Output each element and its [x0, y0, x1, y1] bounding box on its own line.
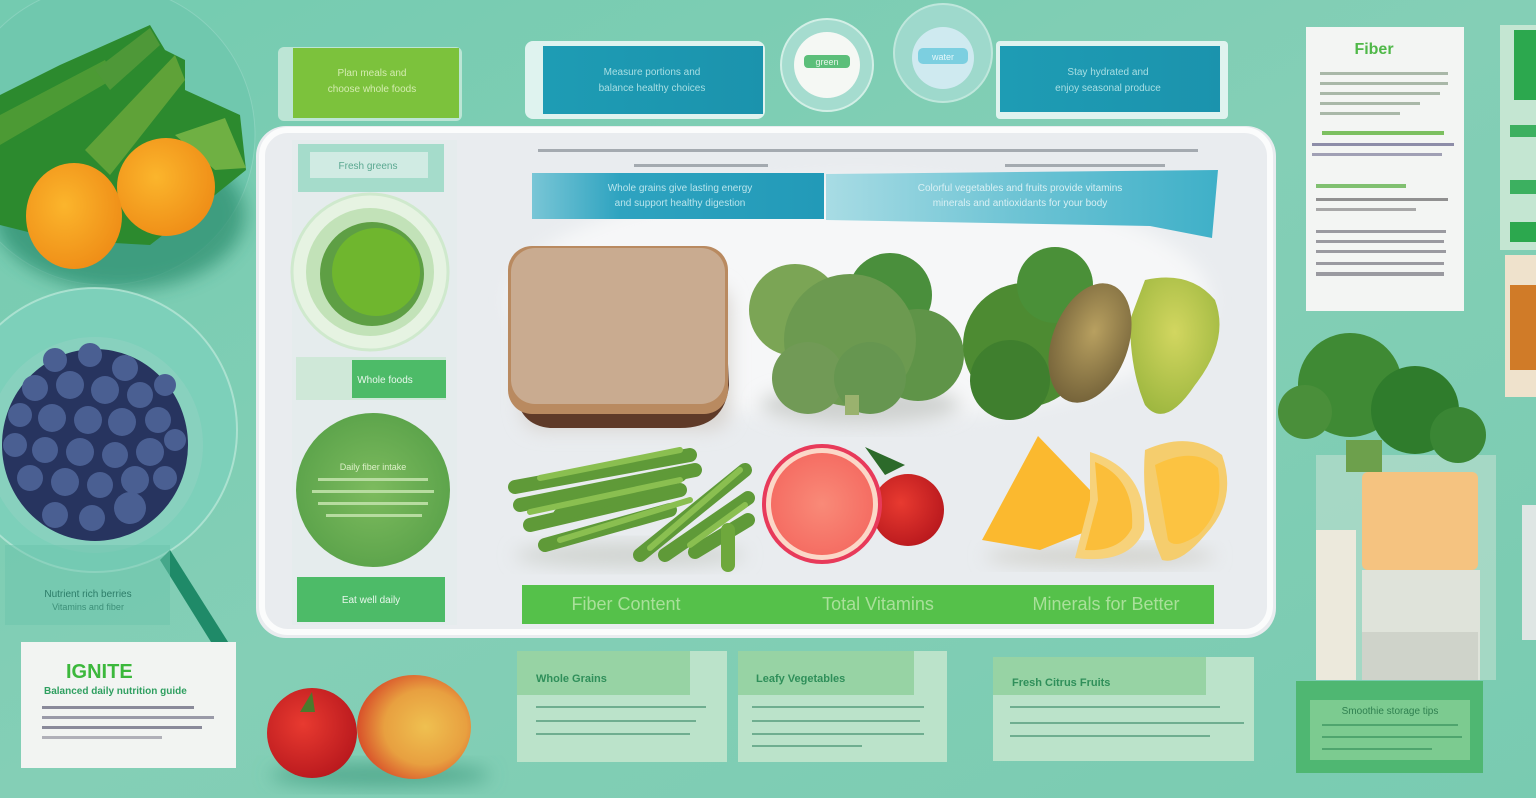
bottom green banner: Minerals for Better	[1032, 594, 1180, 614]
panel: right article: Fiber	[1354, 41, 1394, 58]
panel: top-left greens and oranges	[0, 0, 255, 290]
callout: teal top one	[525, 41, 765, 119]
callout: green top: choose whole foods	[328, 84, 416, 95]
banner: right: Colorful vegetables and fruits provide vitamins	[918, 183, 1122, 194]
food: broccoli	[749, 253, 964, 425]
banner: left	[532, 173, 824, 219]
callout: green top: Plan meals and	[338, 68, 406, 79]
icon: apple and tomato	[267, 675, 490, 787]
label under magnifier	[5, 545, 170, 625]
panel: far right strip	[1500, 25, 1536, 640]
banner: left: and support healthy digestion	[615, 198, 745, 209]
icon: top circle two: water	[931, 52, 954, 62]
note: bottom three: Fresh Citrus Fruits	[1012, 677, 1110, 689]
bottom green banner	[522, 585, 1214, 624]
sidebar bottom tag: Eat well daily	[342, 595, 400, 606]
food: grapefruit and tomato	[762, 444, 944, 564]
header rules	[538, 149, 1198, 167]
callout: teal top two: enjoy seasonal produce	[1055, 83, 1161, 94]
sidebar middle tag	[296, 357, 446, 400]
sidebar middle tag: Whole foods	[357, 375, 413, 386]
green info circle	[296, 413, 450, 567]
banner: left: Whole grains give lasting energy	[608, 183, 752, 194]
callout: teal top one: balance healthy choices	[599, 83, 705, 94]
sidebar header tag	[298, 144, 444, 192]
banner: right	[826, 170, 1218, 238]
main tray	[256, 126, 1276, 638]
icon: top circle two	[894, 4, 992, 102]
panel: blueberry magnifier	[0, 288, 237, 650]
callout: teal top two: Stay hydrated and	[1067, 67, 1149, 78]
bottom green banner: Fiber Content	[571, 594, 681, 614]
icon: top circle one: green	[815, 57, 839, 67]
note: bottom three	[993, 657, 1254, 761]
bottom green banner: Total Vitamins	[822, 594, 934, 614]
food: greens with potato and pear	[963, 247, 1220, 420]
icon: green bowl	[292, 194, 448, 350]
callout: teal top one: Measure portions and	[604, 67, 700, 78]
green info circle: Daily fiber intake	[340, 462, 406, 472]
card: bottom-left note: IGNITE	[66, 661, 133, 683]
callout: teal top two	[996, 41, 1228, 119]
sidebar header tag: Fresh greens	[339, 161, 397, 172]
sidebar column	[292, 140, 457, 625]
note: bottom one: Whole Grains	[536, 673, 607, 685]
food: green beans	[515, 450, 748, 567]
sidebar bottom tag	[297, 577, 445, 622]
callout: green top	[278, 47, 462, 121]
note: bottom two: Leafy Vegetables	[756, 673, 845, 685]
food: bread	[508, 246, 730, 430]
note: bottom right green: Smoothie storage tips	[1342, 706, 1438, 717]
food: orange slices	[982, 436, 1227, 566]
note: bottom right green	[1296, 681, 1483, 773]
note: bottom one	[517, 651, 727, 762]
label under magnifier: Nutrient rich berries	[44, 589, 132, 600]
card: bottom-left note	[21, 642, 236, 768]
label under magnifier: Vitamins and fiber	[52, 602, 124, 612]
icon: top circle one	[781, 19, 873, 111]
note: bottom two	[738, 651, 947, 762]
panel: right article	[1306, 27, 1464, 311]
panel: right broccoli and smoothie jar	[1278, 333, 1496, 680]
card: bottom-left note: Balanced daily nutrition guide	[44, 686, 187, 697]
banner: right: minerals and antioxidants for your body	[933, 198, 1107, 209]
